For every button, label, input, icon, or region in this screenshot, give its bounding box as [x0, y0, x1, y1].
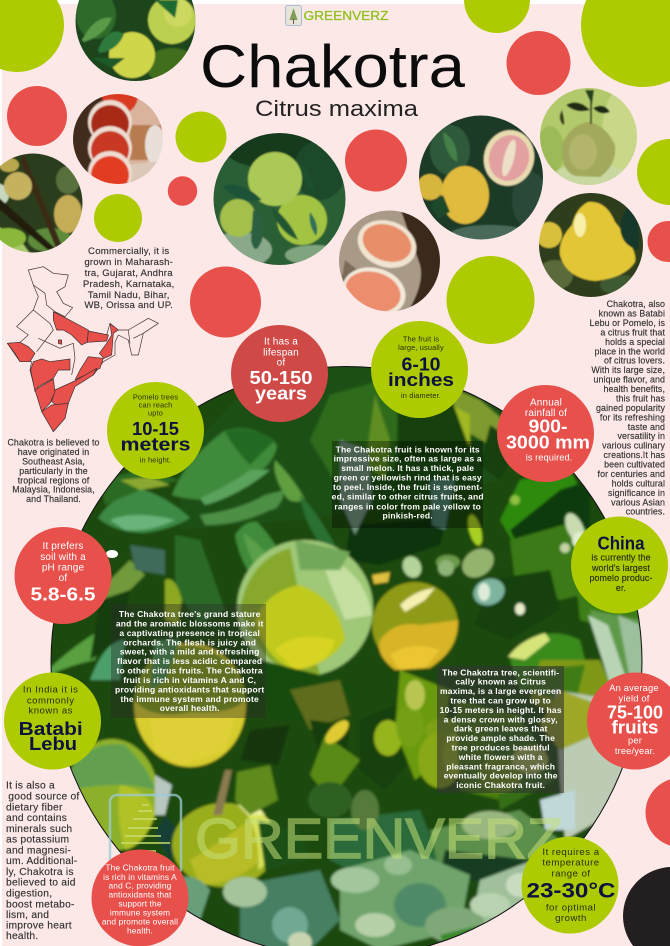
upper canopy colour zones: [180, 360, 520, 565]
fact: yield: An average: [609, 682, 659, 693]
text: introduction: gained popularity: [596, 403, 665, 413]
text: dietary benefits: um. Additional-: [6, 856, 77, 867]
text panel: tree description: tree produces beautiful: [452, 742, 550, 752]
text: introduction: place in the world: [594, 346, 665, 356]
photo: yellow pear-shaped pomelo: [539, 193, 643, 297]
text: commercial growing regions: tra, Gujarat, Andhra: [85, 268, 173, 279]
fact: tree height: can reach: [139, 400, 172, 409]
fact: annual rainfall: is required.: [526, 453, 572, 463]
photo: halved grapefruit: [339, 210, 440, 312]
decorative circle: small red: [168, 176, 197, 206]
fact: Indian name: Batabi: [19, 719, 83, 739]
text panel: fruit description: The Chakotra fruit is known for its: [336, 444, 480, 454]
title: Chakotra: [200, 33, 466, 100]
fact: soil pH: of: [59, 573, 67, 584]
fact: yield: tree/year.: [615, 746, 655, 756]
text panel: fruit description: small melon. It has a thick, pale: [341, 463, 474, 473]
text: introduction: known as Batabi: [599, 309, 665, 319]
text: dietary benefits: digestion,: [6, 888, 52, 899]
fact: Indian name: commonly: [27, 695, 75, 706]
fact: temperature: for optimal: [546, 903, 596, 914]
fact: lifespan: lifespan: [263, 347, 299, 358]
photo: pomelos on branch top: [76, 0, 196, 81]
fact: China: world's largest: [591, 563, 650, 573]
text panel: tree stature and flavour: [111, 604, 266, 718]
fact: vitamins: and C, providing: [109, 881, 172, 891]
text: introduction: holds cultural: [612, 478, 665, 488]
text: commercial growing regions: Pradesh, Karnataka,: [83, 279, 175, 290]
fact: Indian name: Lebu: [29, 734, 77, 754]
text: commercial growing regions: WB, Orissa and UP.: [84, 300, 173, 311]
text: introduction: a citrus fruit that: [600, 327, 665, 337]
photo: hanging green pomelo: [540, 88, 637, 185]
fact: fruit size: large, usually: [398, 343, 444, 352]
fact: vitamins: and promote overall: [102, 917, 178, 927]
text: introduction: been cultivated: [604, 460, 665, 470]
fruit: yellow-green pomelo centre bottom: [172, 800, 276, 887]
text panel: tree stature and flavour: providing antioxidants that support: [115, 684, 264, 694]
fact: yield: fruits: [612, 717, 658, 737]
decorative circle: red left: [7, 86, 67, 146]
text panel: tree stature and flavour: and the aromatic blossoms make it: [116, 618, 264, 628]
fruit: yellow pomelo lower left: [134, 640, 246, 767]
leaves: upper left: [50, 428, 340, 680]
background bokeh: [170, 470, 648, 946]
text panel: tree description: a dense crown with glossy,: [444, 714, 558, 724]
fact: fruit size: The fruit is: [403, 335, 439, 344]
fact: lifespan: It has a: [264, 337, 298, 348]
photo: green pomelos with leaves: [214, 133, 346, 265]
fact: soil pH: [14, 527, 112, 624]
text panel: tree description: white flowers with a: [458, 752, 543, 762]
text: dietary benefits: It is also a: [6, 781, 55, 792]
fact: soil pH: 5.8-6.5: [30, 585, 96, 605]
fact: Indian name: In India it is: [23, 684, 78, 695]
text: introduction: taste and: [628, 422, 665, 432]
fact: lifespan: of: [277, 358, 285, 369]
fact: fruit size: in diameter.: [401, 391, 441, 400]
fact: fruit size: 6-10: [402, 355, 440, 375]
fact: China: er.: [616, 583, 626, 593]
text: introduction: With its large size,: [591, 365, 665, 375]
text panel: tree stature and flavour: orchards. The flesh is juicy and: [123, 637, 256, 647]
text panel: fruit description: pinkish-red.: [383, 511, 433, 521]
text: introduction: this fruit has: [616, 394, 665, 404]
fact: China: is currently the: [591, 553, 651, 563]
main painted pomelo tree image: [30, 350, 670, 946]
photo: pomelo tree: [0, 154, 82, 252]
decorative circle: red lower right: [646, 778, 670, 847]
text panel: tree description: cally known as Citrus: [455, 677, 546, 687]
text: dietary benefits: ly, Chakotra is: [6, 867, 74, 878]
text: introduction: Chakotra, also: [607, 299, 665, 309]
text panel: tree description: pleasant fragrance, which: [446, 761, 555, 771]
fact: Indian name: known as: [28, 706, 73, 717]
decorative circle: lime right edge: [637, 139, 670, 205]
text: introduction: health benefits,: [604, 384, 665, 394]
decorative circle: lime below photos: [446, 256, 534, 344]
text panel: tree stature and flavour: sweet, with a mild and refreshing: [120, 647, 260, 657]
text panel: tree stature and flavour: to other citrus fruits. The Chakotra: [117, 666, 263, 676]
text panel: tree description: eventually develop into the: [444, 771, 558, 781]
text panel: fruit description: [332, 441, 484, 528]
fact: soil pH: soil with a: [40, 552, 86, 563]
fact: annual rainfall: rainfall of: [525, 408, 567, 419]
white blossom: [106, 550, 118, 558]
text: dietary benefits: as potassium: [6, 835, 69, 846]
text: introduction: Lebu or Pomelo, is: [590, 318, 665, 328]
text: dietary benefits: boost metabo-: [6, 899, 75, 910]
decorative circle: lime top centre: [464, 0, 530, 33]
map of India with growing states: [7, 267, 158, 432]
text: dietary benefits: dietary fiber: [6, 802, 63, 813]
text panel: tree stature and flavour: overall health.: [160, 703, 220, 713]
decorative circle: lime left: [176, 112, 226, 162]
fact: China: China: [598, 533, 645, 553]
fact: temperature: [522, 836, 618, 934]
text: commercial growing regions: Tamil Nadu, Bihar,: [88, 290, 170, 301]
fact: tree height: meters: [120, 435, 190, 455]
fact: temperature: growth: [555, 913, 587, 924]
text: origin: Chakotra is believed to: [7, 437, 100, 447]
photo: grapefruit slices: [73, 94, 163, 184]
text: introduction: creations.It has: [604, 450, 665, 460]
fact: annual rainfall: Annual: [530, 397, 562, 408]
text panel: tree description: 10-15 meters in height. It has: [440, 705, 562, 715]
text: origin: Southeast Asia,: [22, 456, 85, 466]
text panel: tree description: tree that can grow up to: [450, 696, 551, 706]
text: introduction: holds a special: [605, 337, 665, 347]
text panel: fruit description: green or yellowish rind that is easy: [334, 473, 482, 483]
text: origin: particularly in the: [19, 466, 88, 476]
fact: vitamins: [92, 850, 188, 946]
fact: Indian name: [4, 672, 101, 770]
text: introduction: versatility in: [618, 431, 665, 441]
fact: lifespan: 50-150: [250, 368, 312, 388]
decorative circle: black bottom right: [623, 867, 670, 946]
text: dietary benefits: health.: [6, 931, 38, 942]
text: dietary benefits: improve heart: [6, 921, 72, 932]
fact: vitamins: immune system: [110, 908, 170, 918]
fruit: golden pomelo centre right: [372, 572, 458, 670]
text panel: tree stature and flavour: the immune system and promote: [120, 694, 259, 704]
text panel: tree description: provide ample shade. The: [446, 733, 555, 743]
fact: tree height: upto: [148, 409, 163, 418]
fact: yield: [587, 672, 670, 770]
subtitle: Citrus maxima: [255, 96, 419, 121]
text panel: fruit description: ranges in color from pale yellow to: [334, 501, 481, 511]
logo: Greenverz: [286, 6, 389, 26]
decorative circle: red upper centre: [345, 130, 407, 192]
fact: soil pH: It prefers: [43, 541, 83, 552]
fact: soil pH: pH range: [42, 563, 84, 574]
watermark brand name: GREENVERZ: [195, 807, 563, 871]
text: introduction: various culinary: [602, 441, 665, 451]
fact: temperature: 23-30°C: [526, 880, 616, 903]
fact: tree height: 10-15: [132, 419, 179, 439]
fact: yield: per: [628, 735, 642, 745]
text: introduction: significance in: [608, 488, 665, 498]
text: dietary benefits: believed to aid: [6, 878, 76, 889]
fact: vitamins: health.: [127, 925, 153, 935]
fact: fruit size: inches: [388, 370, 454, 390]
text: dietary benefits: lism, and: [6, 910, 49, 921]
text: introduction: for its refreshing: [600, 412, 665, 422]
fact: fruit size: [371, 321, 468, 418]
fruit: green pomelo bottom left: [66, 739, 185, 860]
fact: lifespan: [231, 325, 328, 422]
text: dietary benefits: good source of: [8, 791, 80, 802]
fact: yield: 75-100: [607, 702, 663, 722]
fact: vitamins: support the: [118, 899, 162, 909]
text: dietary benefits: and magnesi-: [6, 845, 71, 856]
text panel: tree stature and flavour: The Chakotra tree's grand stature: [119, 609, 261, 619]
text panel: fruit description: to peel. Inside, the fruit is segment-: [333, 482, 482, 492]
text: origin: have originated in: [18, 447, 89, 457]
text: origin: Malaysia, Indonesia,: [12, 485, 95, 495]
fact: vitamins: is rich in vitamins A: [103, 872, 177, 882]
fact: China: pomelo produc-: [589, 573, 653, 583]
fact: China: [571, 516, 668, 614]
fact: lifespan: years: [255, 383, 307, 403]
text: dietary benefits: minerals such: [6, 824, 72, 835]
fruit: large green pomelo: [237, 540, 373, 676]
text: introduction: various Asian: [611, 497, 665, 507]
decorative circle: lime top right: [581, 0, 670, 87]
fact: temperature: It requires a: [542, 847, 600, 858]
photo: cut pomelo on tree: [419, 116, 543, 240]
text panel: tree description: maxima, is a large evergreen: [440, 686, 561, 696]
text panel: tree description: dark green leaves that: [454, 724, 548, 734]
fact: vitamins: antioxidants that: [108, 890, 172, 900]
text panel: tree description: iconic Chakotra fruit.: [456, 780, 545, 790]
decorative circle: red top right: [506, 31, 570, 95]
text panel: fruit description: ed, similar to other citrus fruits, and: [332, 492, 484, 502]
fact: temperature: temperature: [542, 858, 600, 869]
logo: Greenverz: GREENVERZ: [304, 9, 389, 23]
decorative circle: red right edge: [648, 221, 670, 262]
fact: annual rainfall: 3000 mm: [506, 432, 590, 452]
text: introduction: for centuries and: [598, 469, 665, 479]
fact: tree height: in height.: [140, 455, 171, 464]
text panel: tree stature and flavour: a captivating presence in tropical: [119, 628, 260, 638]
text panel: tree stature and flavour: flavor that is less acidic compared: [117, 656, 262, 666]
text panel: tree description: The Chakotra tree, scientifi-: [442, 667, 559, 677]
fact: tree height: [107, 382, 204, 479]
text: commercial growing regions: Commercially, it is: [88, 246, 169, 257]
decorative circle: lime top left: [0, 0, 64, 72]
text: dietary benefits: and contains: [6, 813, 67, 824]
fact: tree height: Pomelo trees: [133, 392, 178, 401]
text panel: tree description: [437, 666, 564, 793]
decorative circle: red centre: [190, 266, 261, 338]
fact: annual rainfall: [497, 385, 594, 482]
fact: annual rainfall: 900-: [528, 417, 568, 437]
text: introduction: unique flavor, and: [593, 375, 665, 385]
watermark logo: [110, 795, 181, 875]
text: introduction: of citrus lovers.: [604, 356, 665, 366]
decorative circle: lime lower left: [94, 194, 142, 242]
text: origin: tropical regions of: [18, 475, 90, 485]
text: commercial growing regions: grown in Maharash-: [84, 257, 173, 268]
text panel: tree stature and flavour: fruit is rich in vitamins A and C,: [123, 675, 256, 685]
fact: temperature: range of: [551, 869, 591, 880]
text panel: fruit description: impressive size, often as large as a: [334, 454, 482, 464]
text: origin: and Thailand.: [26, 494, 81, 504]
fact: yield: yield of: [619, 693, 650, 704]
fact: vitamins: The Chakotra fruit: [105, 863, 175, 873]
text: introduction: countries.: [626, 507, 665, 517]
